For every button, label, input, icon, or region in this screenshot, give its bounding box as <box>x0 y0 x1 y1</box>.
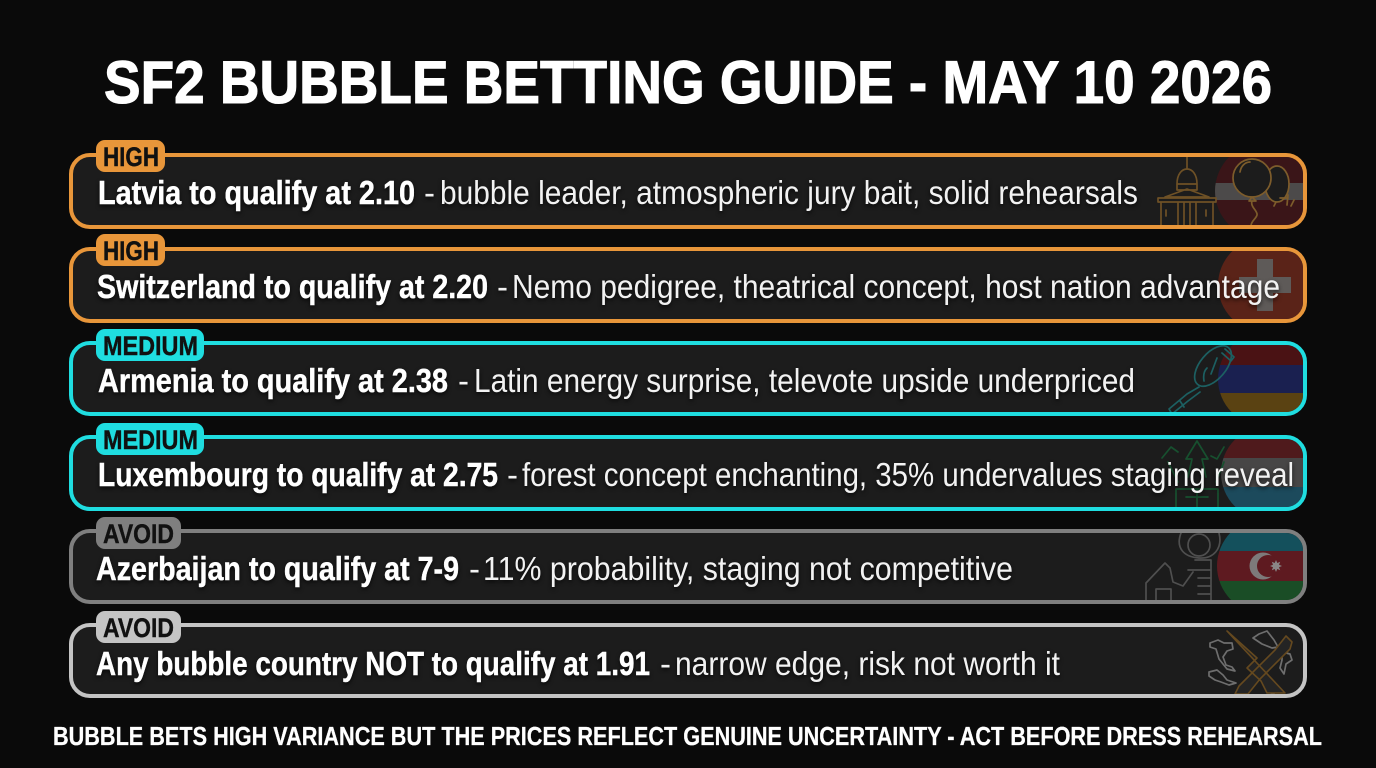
text: Azerbaijan bet: - <box>469 550 480 587</box>
badge: HIGH: HIGH <box>103 236 159 266</box>
panel: Azerbaijan <box>69 517 1307 604</box>
text: Luxembourg bet: forest concept enchanting, 35% undervalues staging reveal <box>522 456 1294 493</box>
badge: MEDIUM: MEDIUM <box>103 425 198 455</box>
icon: parliament <box>1158 157 1216 226</box>
icon: Armenia flag <box>1218 345 1303 412</box>
text: Any bubble country bet <box>96 645 1060 682</box>
text: Azerbaijan bet: 11% probability, staging not competitive <box>483 550 1013 587</box>
icon: forest <box>1162 441 1224 508</box>
icon: Latvia flag <box>1215 157 1303 225</box>
text: Luxembourg bet: - <box>507 456 518 493</box>
text: Any bubble country bet: Any bubble country NOT to qualify at 1.91 <box>96 645 650 682</box>
icon: microphone <box>1168 345 1235 412</box>
text: Any bubble country bet: narrow edge, risk not worth it <box>675 645 1060 682</box>
panel: Latvia <box>69 140 1307 229</box>
text: Latvia bet: Latvia to qualify at 2.10 <box>98 174 415 211</box>
icon: Swiss flag <box>1218 251 1303 319</box>
title: SF2 BUBBLE BETTING GUIDE - MAY 10 2026 <box>104 49 1272 116</box>
panel: Switzerland <box>71 234 1312 332</box>
text: Latvia bet: bubble leader, atmospheric jury bait, solid rehearsals <box>440 174 1138 211</box>
text: Switzerland bet: Nemo pedigree, theatrical concept, host nation advantage <box>512 268 1280 305</box>
text: Armenia bet: Armenia to qualify at 2.38 <box>98 362 448 399</box>
text: Armenia bet: Latin energy surprise, televote upside underpriced <box>474 362 1135 399</box>
icon: tower and figure <box>1146 533 1220 602</box>
text: Switzerland bet: - <box>497 268 508 305</box>
text: Latvia bet: - <box>424 174 435 211</box>
text: Luxembourg bet <box>98 456 1294 493</box>
badge: AVOID: AVOID <box>103 519 174 549</box>
badge: MEDIUM: MEDIUM <box>103 331 198 361</box>
text: Any bubble country bet: - <box>660 645 671 682</box>
text: Armenia bet <box>98 362 1135 399</box>
text: Luxembourg bet: Luxembourg to qualify at 2.75 <box>98 456 498 493</box>
icon: crossed out map <box>1209 631 1292 694</box>
panel: Any bubble country <box>71 611 1305 696</box>
panel: Armenia <box>69 329 1307 416</box>
text: Azerbaijan bet: Azerbaijan to qualify at 7-9 <box>96 550 459 587</box>
icon: Azerbaijan flag <box>1217 533 1303 600</box>
icon: balloons <box>1233 159 1294 226</box>
text: Switzerland bet <box>97 268 1280 305</box>
panel: Luxembourg <box>69 423 1307 511</box>
icon: Luxembourg flag <box>1221 439 1303 507</box>
badge: HIGH: HIGH <box>103 142 159 172</box>
text: Switzerland bet: Switzerland to qualify at 2.20 <box>97 268 488 305</box>
text: Azerbaijan bet <box>96 550 1013 587</box>
text: Armenia bet: - <box>458 362 469 399</box>
text: Latvia bet <box>98 174 1138 211</box>
badge: AVOID: AVOID <box>103 613 174 643</box>
